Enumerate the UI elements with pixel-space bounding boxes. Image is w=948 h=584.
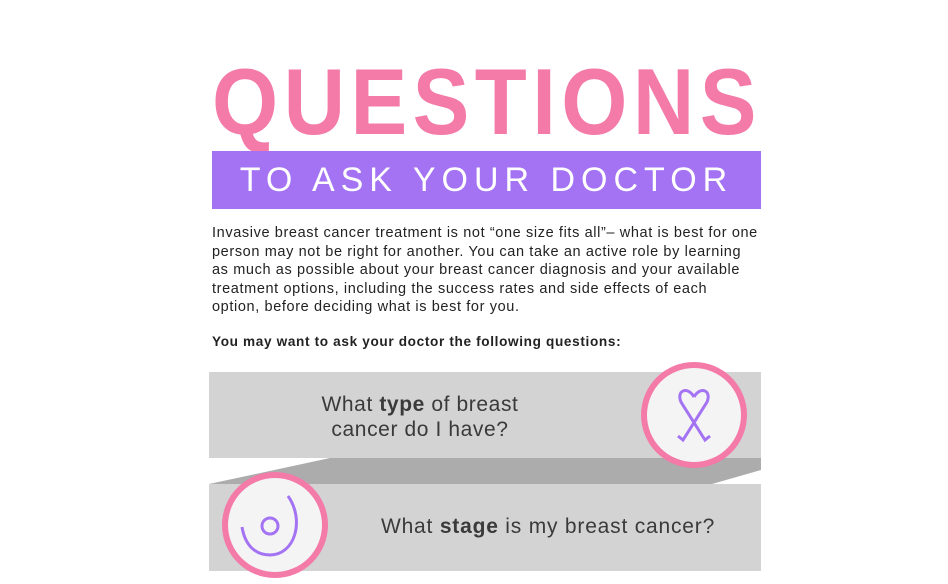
- icon: ribbon: [641, 362, 747, 468]
- title: QUESTIONS: [212, 49, 762, 154]
- intro paragraph: option, before deciding what is best for you.: [212, 299, 520, 315]
- subtitle band: TO ASK YOUR DOCTOR: [240, 161, 733, 199]
- intro paragraph: [212, 225, 758, 315]
- intro paragraph: Invasive breast cancer treatment is not “one size fits all”– what is best for one: [212, 225, 758, 241]
- question 1 bar: What type of breast: [321, 393, 519, 416]
- icon: breast: [222, 472, 328, 578]
- question 1 bar: [209, 372, 761, 458]
- subtitle band: [212, 151, 761, 209]
- intro paragraph: as much as possible about your breast cancer diagnosis and your available: [212, 262, 740, 278]
- question 1 bar: cancer do I have?: [331, 418, 509, 441]
- question 2 bar: What stage is my breast cancer?: [381, 515, 715, 538]
- intro paragraph: treatment options, including the success rates and side effects of each: [212, 280, 707, 296]
- lead-in: You may want to ask your doctor the following questions:: [212, 334, 621, 349]
- intro paragraph: person may not be right for another. You can take an active role by learning: [212, 244, 741, 260]
- question 2 bar: [209, 484, 761, 571]
